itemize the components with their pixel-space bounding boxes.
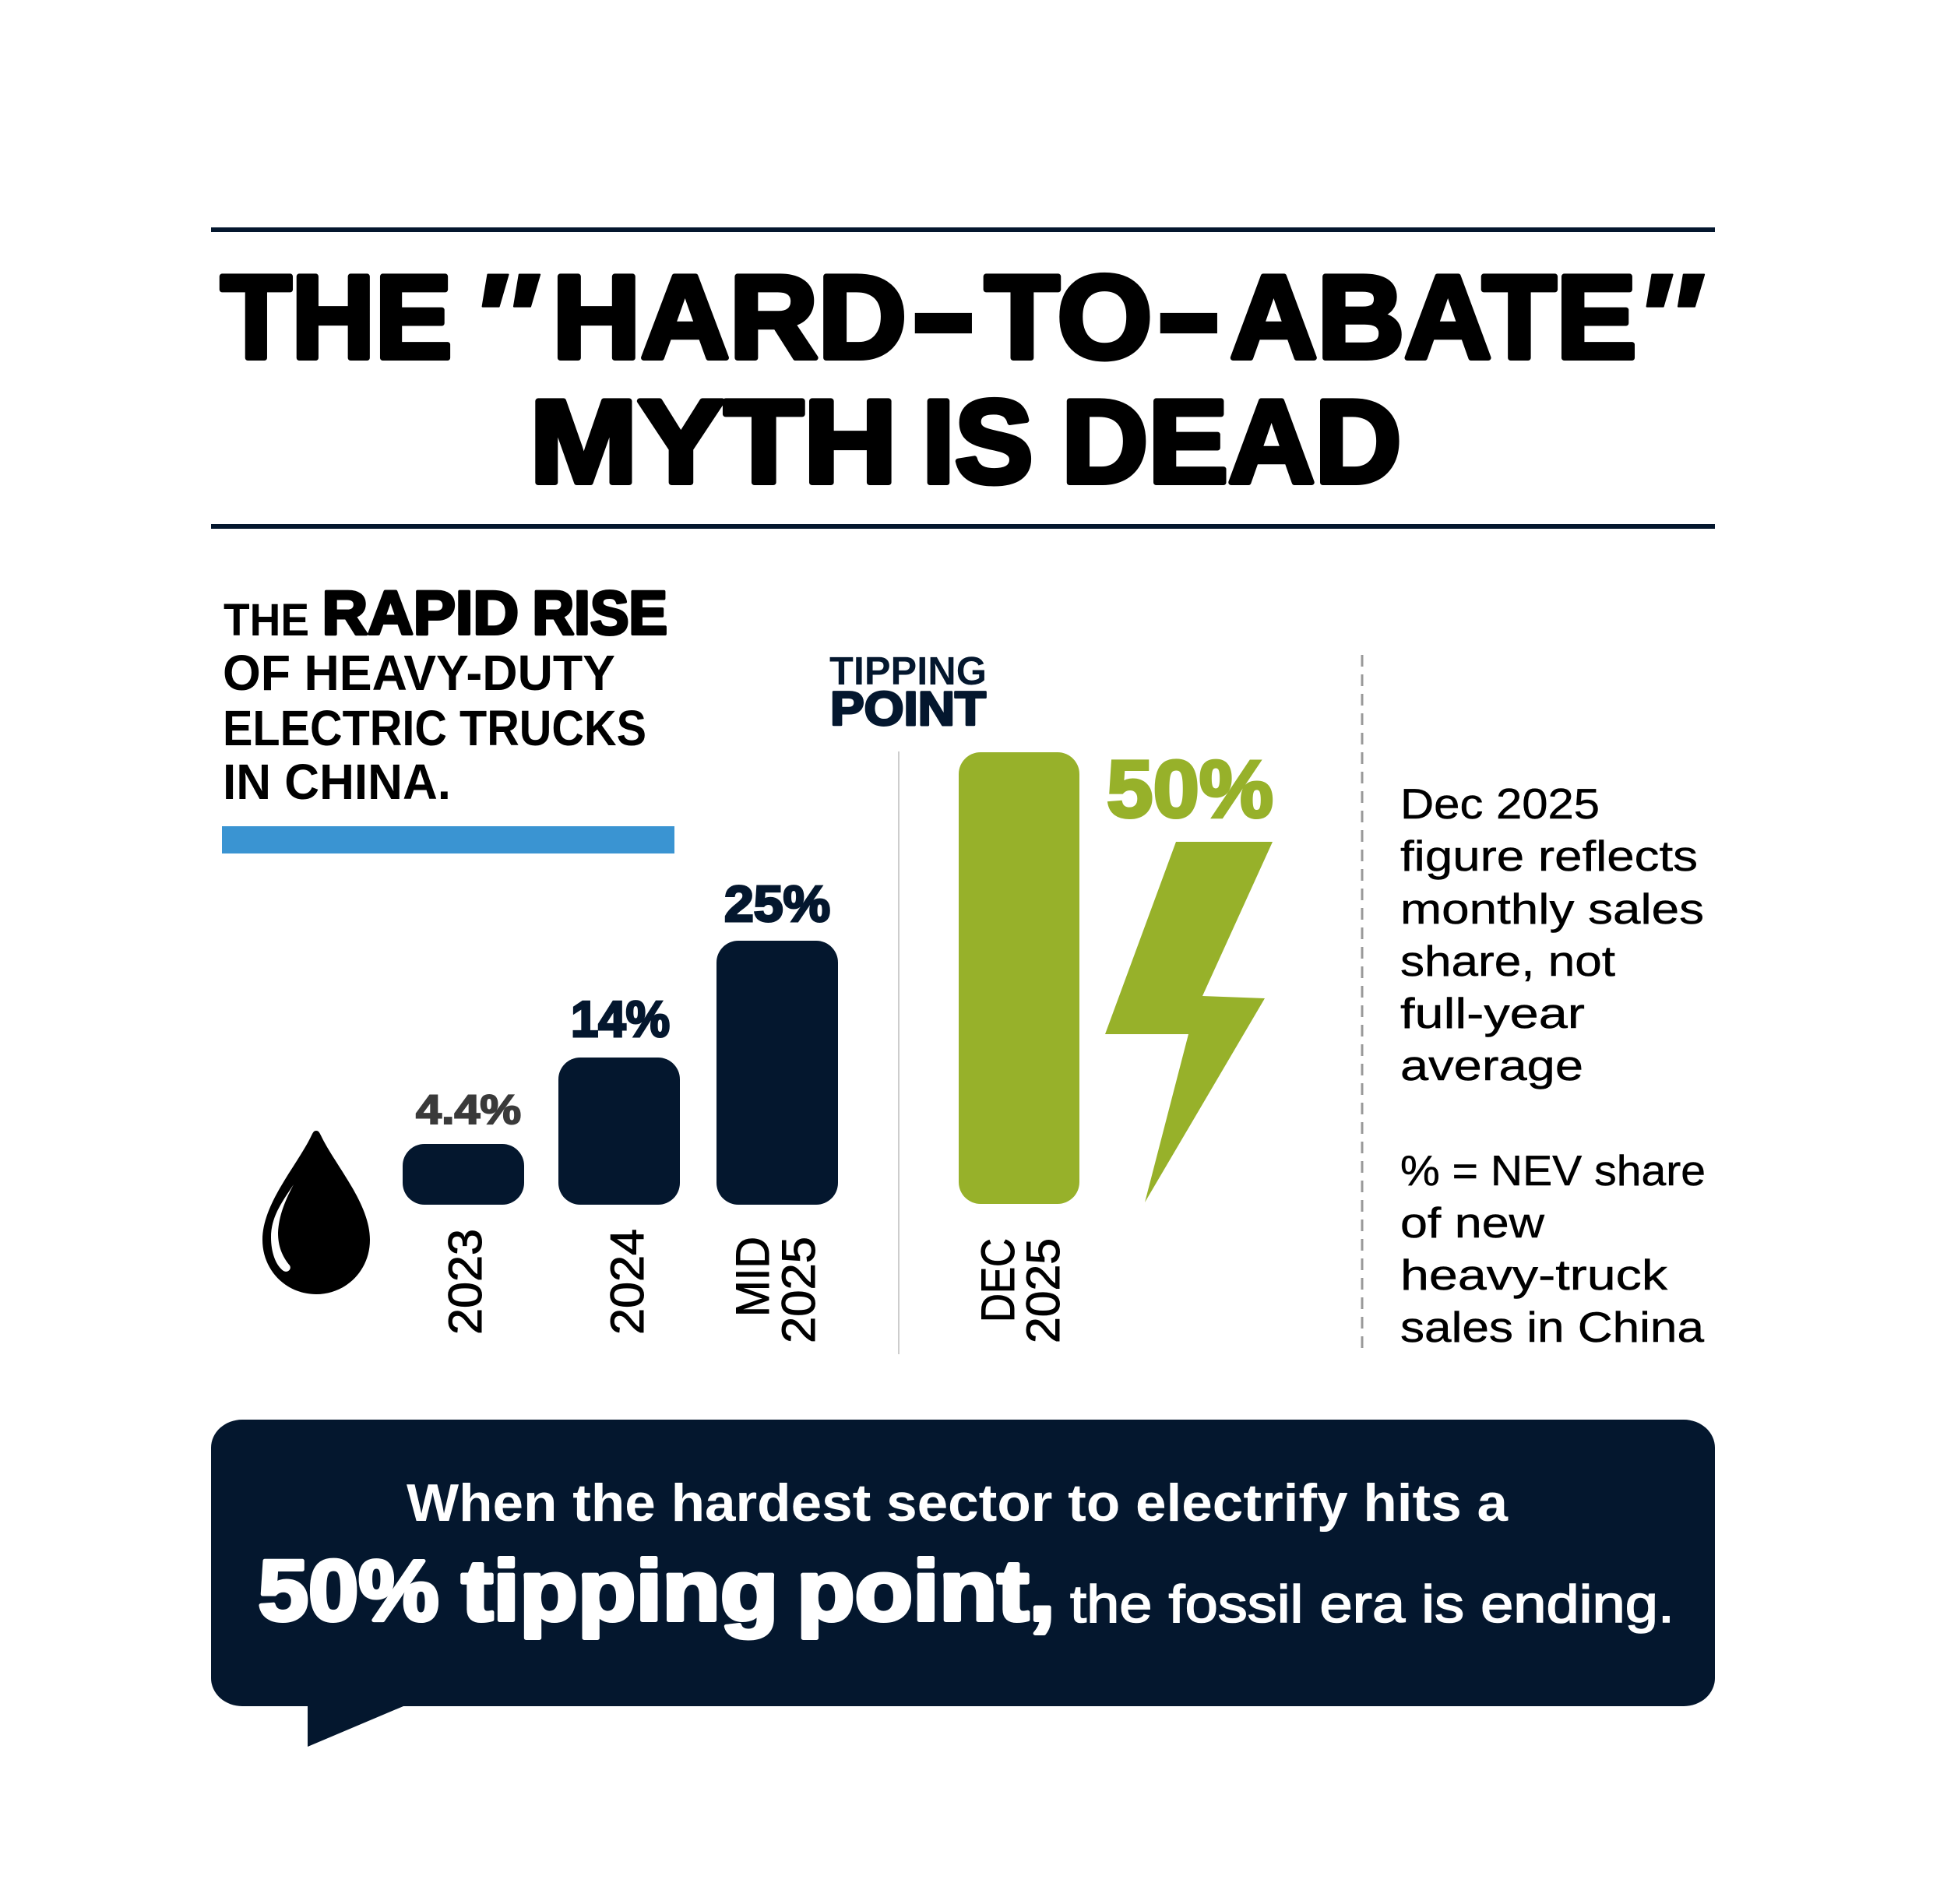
50% label: 50% bbox=[1107, 744, 1273, 835]
notes text: average bbox=[1400, 1041, 1583, 1089]
title line 1: - bbox=[1151, 213, 1226, 404]
notes text: % = NEV share bbox=[1400, 1146, 1706, 1195]
title line 2: DEAD bbox=[1062, 375, 1402, 508]
tipping point label: POINT bbox=[830, 682, 986, 735]
icon: lightning bolt bbox=[1105, 842, 1273, 1202]
notes text bbox=[1400, 780, 1706, 1351]
bar 2023 bbox=[403, 1087, 524, 1335]
title line 1: HARD bbox=[552, 251, 907, 383]
title line 2 bbox=[530, 375, 1402, 508]
callout line 1: When the hardest sector to electrify hits a bbox=[407, 1473, 1509, 1533]
title line 2: IS bbox=[922, 375, 1033, 508]
title line 1: TO bbox=[984, 251, 1153, 383]
bar 2023: 4.4% bbox=[416, 1087, 521, 1133]
bar mid 2025: 25% bbox=[724, 875, 830, 932]
notes text: share, not bbox=[1400, 937, 1615, 985]
notes text: full-year bbox=[1400, 989, 1585, 1037]
title line 1: ABATE bbox=[1231, 251, 1637, 383]
bar 2024: 2024 bbox=[601, 1229, 653, 1335]
callout line 2 bold: tipping bbox=[461, 1543, 779, 1638]
blue accent bar bbox=[222, 826, 674, 853]
title line 1: - bbox=[907, 213, 981, 404]
title line 1: " bbox=[1631, 247, 1704, 390]
subtitle heading bbox=[223, 578, 667, 810]
tipping point label bbox=[829, 649, 987, 735]
tipping point label: TIPPING bbox=[829, 649, 987, 693]
notes text: Dec 2025 bbox=[1400, 780, 1600, 828]
bar 2023: 2023 bbox=[439, 1229, 491, 1335]
bar dec 2025: 2025 bbox=[1017, 1238, 1069, 1343]
notes text: figure reflects bbox=[1400, 832, 1698, 880]
subtitle heading: RISE bbox=[533, 578, 667, 647]
subtitle heading: ELECTRIC TRUCKS bbox=[223, 700, 646, 756]
notes text: of new bbox=[1400, 1198, 1544, 1247]
subtitle heading: OF HEAVY-DUTY bbox=[223, 645, 615, 701]
bar 2024: 14% bbox=[571, 991, 670, 1047]
callout line 2 bold: 50% bbox=[259, 1543, 439, 1638]
subtitle heading: THE bbox=[224, 595, 309, 646]
notes text: heavy-truck bbox=[1400, 1251, 1668, 1299]
bar mid 2025: 2025 bbox=[773, 1237, 825, 1343]
title block bbox=[211, 213, 1715, 529]
bar mid 2025: MID bbox=[727, 1237, 779, 1317]
title line 1 bbox=[221, 213, 1704, 404]
dashed divider bbox=[1361, 655, 1363, 1349]
callout line 2 bold bbox=[259, 1543, 1055, 1638]
bar mid 2025 bbox=[716, 875, 838, 1343]
title line 1: " bbox=[467, 247, 540, 390]
icon: oil drop bbox=[262, 1131, 370, 1294]
title line 1: THE bbox=[221, 251, 452, 383]
bar dec 2025 bbox=[959, 752, 1079, 1343]
callout line 2 regular: the fossil era is ending. bbox=[1070, 1575, 1674, 1634]
subtitle heading: RAPID bbox=[322, 578, 519, 647]
subtitle heading: IN CHINA. bbox=[223, 754, 451, 810]
callout line 2 bold: point, bbox=[797, 1543, 1055, 1638]
bar chart bbox=[403, 752, 1079, 1343]
callout bbox=[211, 1420, 1715, 1747]
title line 2: MYTH bbox=[530, 375, 897, 508]
notes text: monthly sales bbox=[1400, 885, 1704, 933]
notes text: sales in China bbox=[1400, 1303, 1704, 1351]
bar dec 2025: DEC bbox=[972, 1238, 1024, 1322]
bar 2024 bbox=[558, 991, 680, 1335]
tipping point divider bbox=[898, 751, 900, 1354]
